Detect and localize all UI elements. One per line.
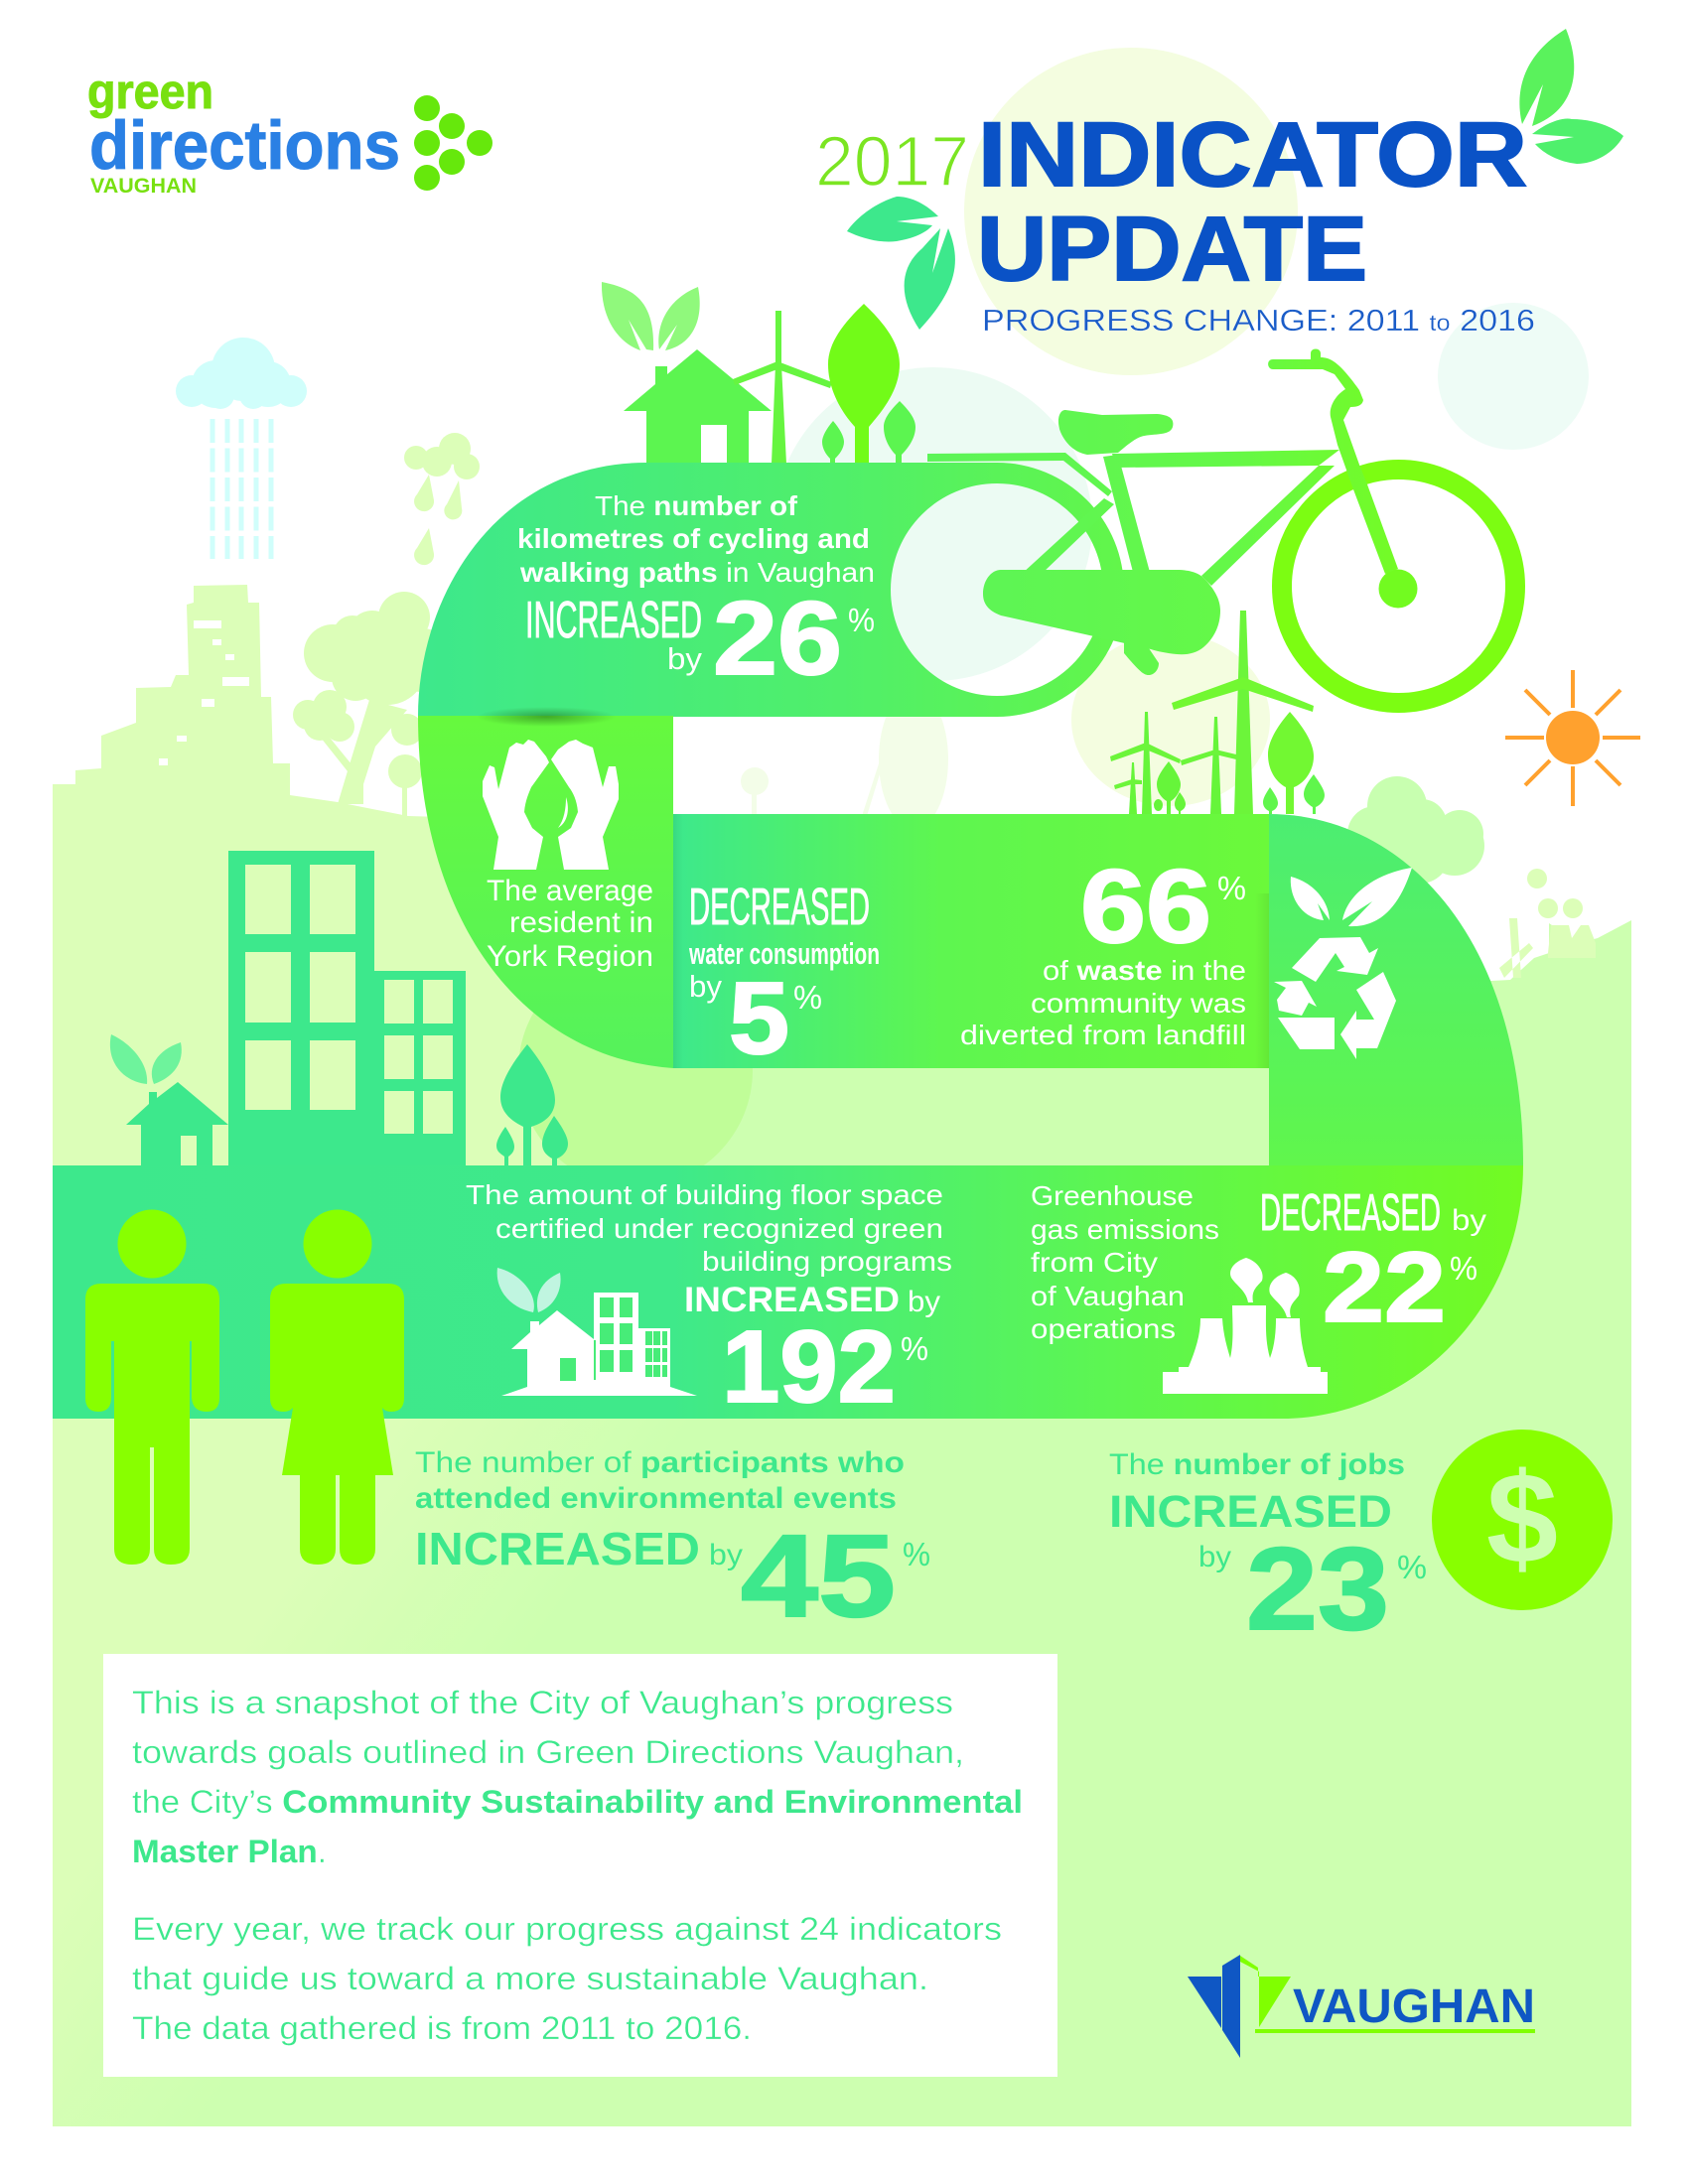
lower scene: wind turbines and trees [1110, 611, 1325, 814]
icon: hands and water drop [483, 740, 619, 870]
logo: green directions vaughan: VAUGHAN [90, 175, 197, 198]
bottom band [53, 1165, 1523, 1419]
text: greenhouse gas emissions: Greenhouse [1031, 1180, 1194, 1211]
text: jobs [1109, 1448, 1427, 1655]
text: waste diverted: of waste in the [1043, 955, 1246, 986]
logo: green directions vaughan [87, 66, 492, 198]
text: water consumption: % [793, 979, 822, 1016]
text: water consumption: The average [487, 875, 653, 907]
text: jobs: % [1397, 1549, 1427, 1585]
text: environmental event participants: % [903, 1536, 930, 1572]
text: green building floor space: The amount of building floor space [466, 1179, 943, 1210]
small rain cloud [404, 433, 480, 565]
text: greenhouse gas emissions: gas emissions [1031, 1214, 1219, 1245]
background landscape [53, 585, 1631, 2126]
text: jobs: by [1198, 1541, 1231, 1573]
top band [418, 463, 1124, 717]
logo: city of vaughan: VAUGHAN [1293, 1980, 1535, 2033]
pale trees at left [293, 592, 454, 816]
man [85, 1209, 219, 1565]
text: waste diverted: 66 [1080, 849, 1211, 965]
text: greenhouse gas emissions: operations [1031, 1313, 1176, 1344]
text: green building floor space: 192 [722, 1309, 896, 1424]
text: jobs: The number of jobs [1109, 1448, 1405, 1481]
text: greenhouse gas emissions: DECREASED [1260, 1184, 1441, 1242]
title: UPDATE [977, 199, 1367, 300]
text: green building floor space: building programs [702, 1246, 952, 1277]
text: water consumption [487, 875, 880, 1075]
text: water consumption: 5 [729, 961, 789, 1075]
text: environmental event participants: attended environmental events [415, 1482, 897, 1515]
pale background circles [741, 48, 1589, 829]
text: environmental event participants: 45 [741, 1511, 896, 1642]
text: waste diverted [960, 849, 1246, 1050]
title [815, 104, 1535, 338]
text: environmental event participants [415, 1446, 930, 1642]
text: water consumption: resident in [509, 906, 653, 939]
panel: snapshot description [103, 1654, 1057, 2077]
rain cloud [176, 338, 307, 559]
text: environmental event participants: INCREASED [415, 1523, 700, 1574]
faint factory and turbines at right [1499, 869, 1596, 978]
title: PROGRESS CHANGE: 2011 to 2016 [982, 303, 1535, 338]
text: cycling and walking paths: by [667, 641, 703, 676]
icon: house and buildings [497, 1268, 697, 1396]
text: cycling and walking paths: % [848, 602, 875, 638]
logo: green directions vaughan: green [87, 66, 213, 119]
text: water consumption: DECREASED [689, 879, 870, 936]
text: green building floor space: % [901, 1330, 928, 1367]
icon: dollar coin [1432, 1430, 1613, 1610]
text: greenhouse gas emissions: of Vaughan [1031, 1281, 1185, 1311]
right curved band [1255, 814, 1523, 1165]
pale tree at right [1347, 776, 1484, 884]
text: greenhouse gas emissions: % [1450, 1250, 1477, 1287]
text: jobs: INCREASED [1109, 1486, 1392, 1537]
text: green building floor space [466, 1179, 952, 1424]
text: greenhouse gas emissions [1031, 1180, 1486, 1344]
text: green building floor space: by [908, 1286, 940, 1318]
left vertical band [418, 707, 673, 1068]
title: 2017 [815, 123, 969, 202]
panel: snapshot description: the City’s Community Sustainability and Environmental [132, 1784, 1023, 1820]
text: greenhouse gas emissions: by [1452, 1204, 1486, 1237]
woman [270, 1209, 404, 1565]
text: water consumption: by [689, 969, 722, 1004]
icon: factory with smoke [1163, 1258, 1328, 1394]
panel: snapshot description: that guide us toward a more sustainable Vaughan. [132, 1961, 928, 1996]
trees by building [496, 1044, 568, 1165]
text: cycling and walking paths: INCREASED [525, 592, 702, 649]
text: waste diverted: community was [1031, 988, 1246, 1019]
top scene: house, turbine, trees [602, 282, 915, 464]
text: cycling and walking paths: walking paths in Vaughan [519, 557, 875, 588]
text: green building floor space: certified under recognized green [495, 1213, 943, 1244]
text: cycling and walking paths: kilometres of cycling and [517, 523, 870, 554]
text: jobs: 23 [1246, 1524, 1389, 1655]
leaves around title [847, 29, 1623, 330]
text: green building floor space: INCREASED [684, 1281, 900, 1319]
text: cycling and walking paths: The number of [595, 490, 798, 521]
text: environmental event participants: by [709, 1539, 743, 1571]
text: greenhouse gas emissions: from City [1031, 1247, 1158, 1278]
text: environmental event participants: The number of participants who [415, 1446, 905, 1479]
logo: city of vaughan [1188, 1955, 1535, 2058]
text: water consumption: York Region [487, 940, 653, 973]
middle band [673, 814, 1269, 1068]
panel: snapshot description: towards goals outlined in Green Directions Vaughan, [132, 1734, 964, 1770]
text: cycling and walking paths [517, 490, 875, 697]
small house with sprout [110, 1034, 228, 1165]
panel: snapshot description: Every year, we track our progress against 24 indicators [132, 1911, 1002, 1947]
sun [1505, 670, 1640, 806]
logo: green directions vaughan: directions [89, 107, 400, 184]
panel: snapshot description: This is a snapshot of the City of Vaughan’s progress [132, 1685, 953, 1720]
city buildings [228, 851, 466, 1169]
panel: snapshot description: Master Plan. [132, 1834, 327, 1869]
text: waste diverted: % [1217, 870, 1246, 906]
text: greenhouse gas emissions: 22 [1323, 1232, 1446, 1343]
panel: snapshot description: The data gathered is from 2011 to 2016. [132, 2010, 752, 2046]
icon: leaves and recycling symbol [1274, 868, 1412, 1059]
text: cycling and walking paths: 26 [713, 581, 842, 697]
text: waste diverted: diverted from landfill [960, 1020, 1246, 1050]
title: INDICATOR [978, 104, 1527, 205]
icon: dollar coin: $ [1486, 1445, 1558, 1590]
people [85, 1209, 404, 1565]
bicycle [927, 349, 1515, 703]
text: water consumption: water consumption [688, 936, 880, 971]
